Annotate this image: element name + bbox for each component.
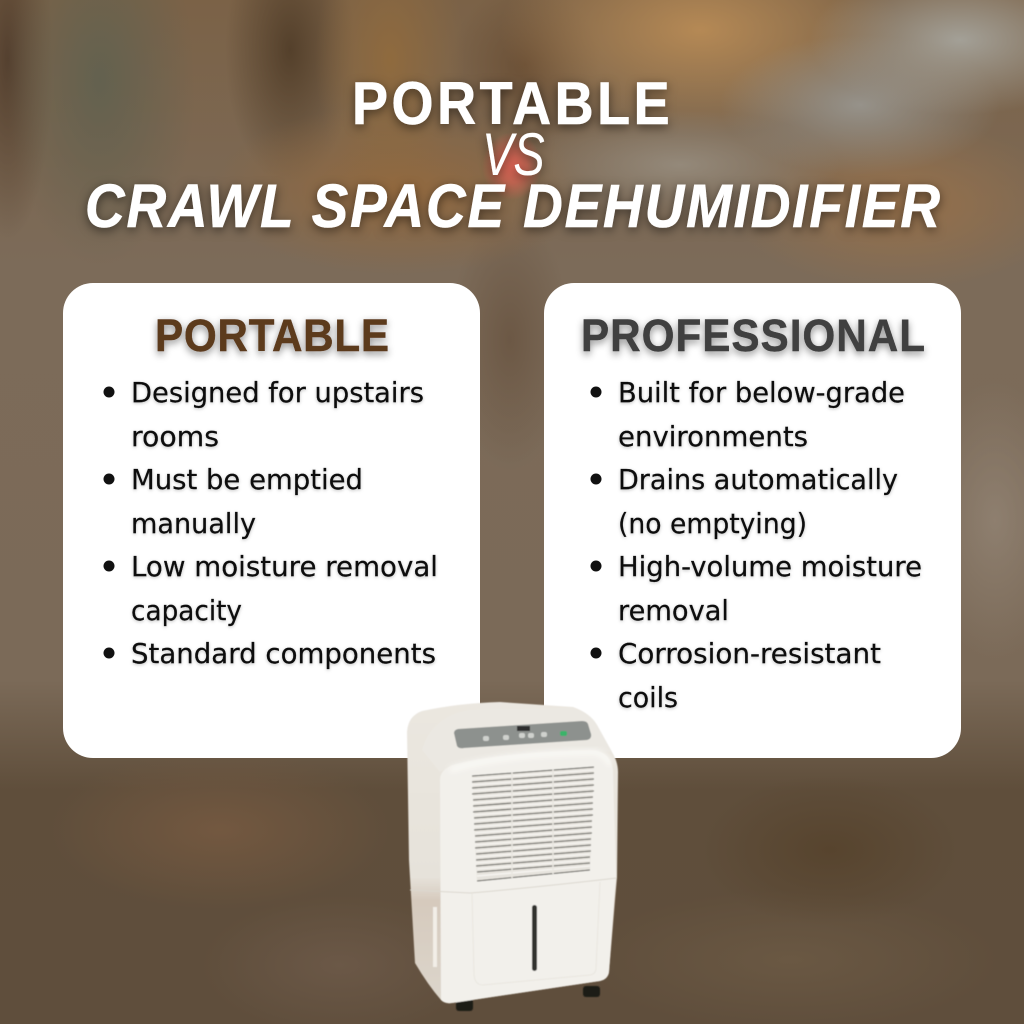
title line: Crawl Space Dehumidifier: CRAWL SPACE DEHUMIDIFIER	[85, 172, 940, 241]
bullet list: professional features: coils	[618, 682, 678, 714]
title line: Portable: PORTABLE	[352, 70, 672, 138]
tank seam	[410, 878, 617, 893]
shoulder highlight	[450, 752, 610, 770]
image: portable dehumidifier	[407, 702, 618, 1011]
bullet list: portable features: Designed for upstairs	[131, 377, 424, 409]
bullet list: professional features: High-volume moisture	[618, 551, 922, 583]
bullet list: portable features: rooms	[131, 421, 219, 453]
grille dividers	[512, 769, 553, 878]
bullet list: professional features: Drains automatically	[618, 464, 898, 496]
bullet list: professional features: Built for below-grade	[618, 377, 905, 409]
heading: professional: PROFESSIONAL	[581, 311, 925, 361]
control panel	[454, 721, 591, 748]
display and buttons	[483, 726, 567, 741]
wheels	[456, 986, 600, 1011]
side handle	[433, 907, 437, 967]
bullet list: professional features: removal	[618, 595, 729, 627]
top shoulder	[422, 708, 612, 772]
panel: portable	[63, 283, 480, 758]
bullet list: portable features: capacity	[131, 595, 242, 627]
bullet list: professional features: (no emptying)	[618, 508, 807, 540]
title line: vs: VS	[482, 122, 545, 188]
bullet list: portable features: manually	[131, 508, 256, 540]
grille vents	[472, 767, 594, 881]
panel: professional	[544, 283, 961, 758]
body front	[440, 750, 616, 1003]
bullet list: portable features	[104, 377, 438, 670]
bullet list: professional features	[590, 377, 922, 714]
bullet list: portable features: Must be emptied	[131, 464, 363, 496]
title	[85, 70, 940, 241]
bullet list: professional features: Corrosion-resistant	[618, 638, 881, 670]
heading: portable: PORTABLE	[155, 311, 389, 361]
water level window	[532, 905, 537, 971]
bullet list: portable features: Standard components	[131, 638, 436, 670]
bullet list: portable features: Low moisture removal	[131, 551, 438, 583]
body shell	[407, 702, 618, 1003]
bullet list: professional features: environments	[618, 421, 808, 453]
